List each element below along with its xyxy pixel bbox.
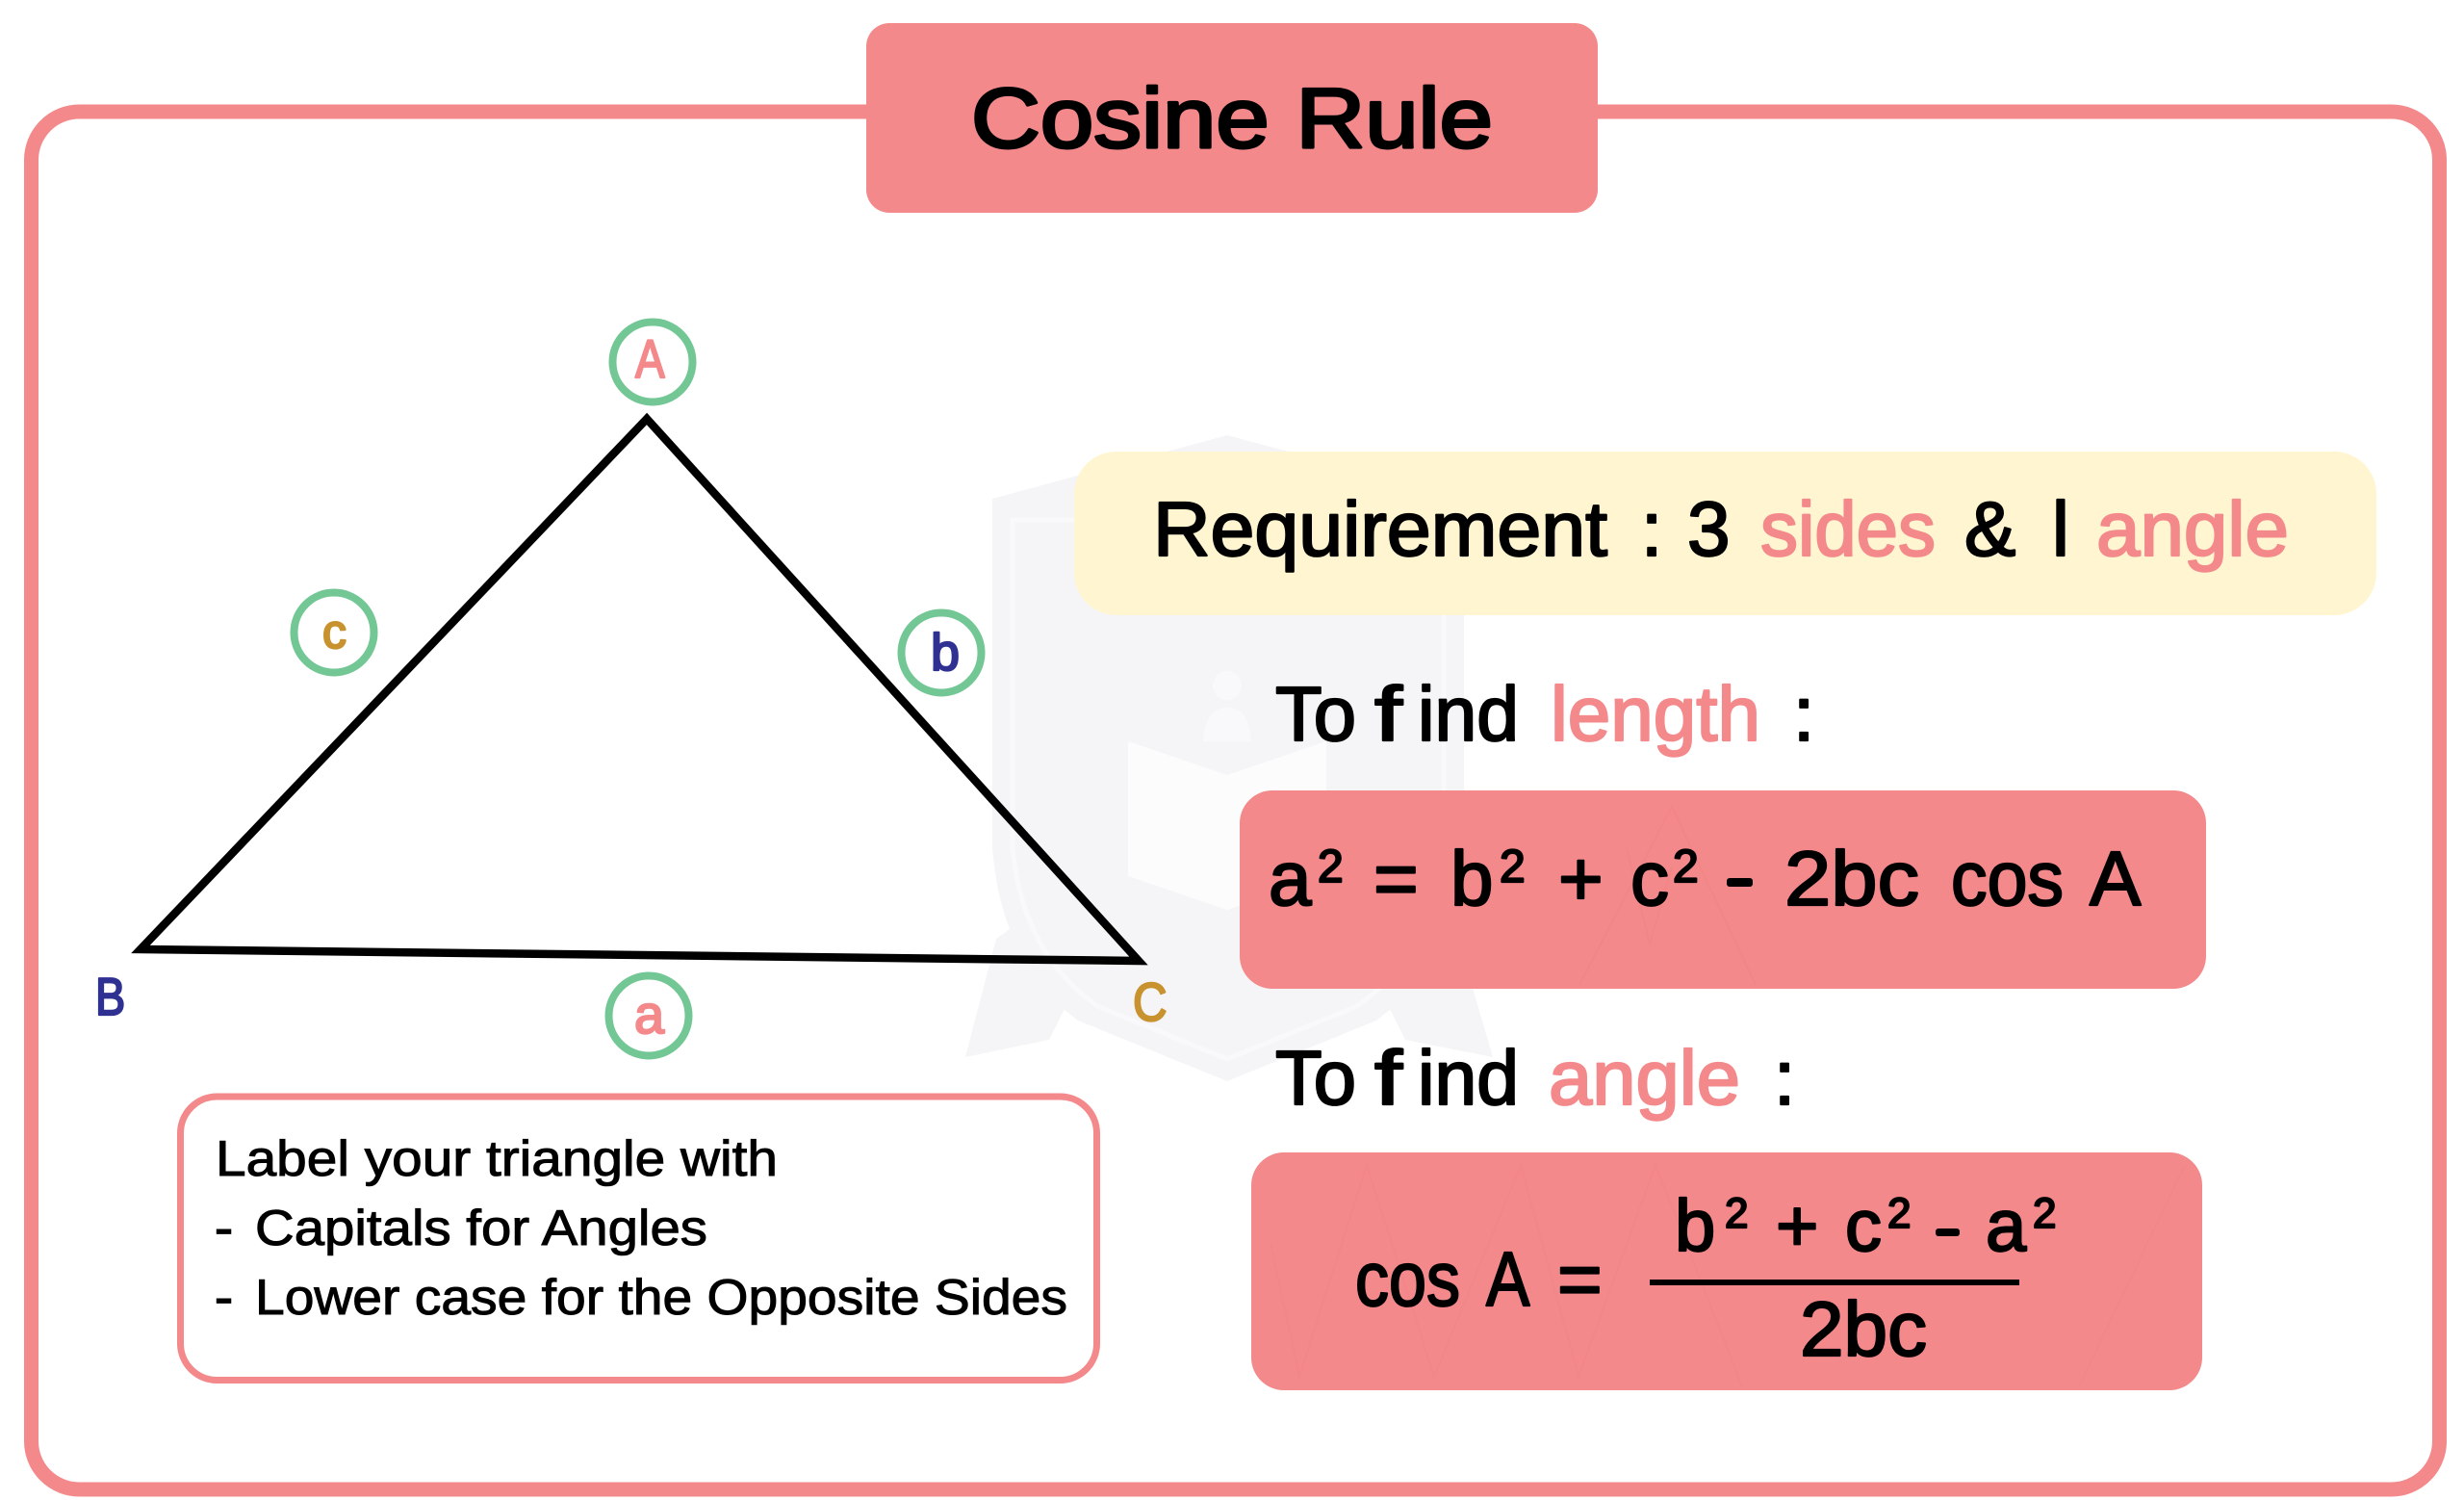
- formula box: length: [1240, 790, 2206, 989]
- fraction numerator: 2: [1887, 1190, 1911, 1237]
- formula left side: =: [1557, 1236, 1603, 1322]
- requirement text: :: [1641, 486, 1662, 572]
- fraction numerator: [1675, 1185, 2056, 1267]
- requirement box: [1074, 452, 2376, 615]
- fraction numerator: a: [1986, 1185, 2027, 1267]
- side label b: [901, 612, 982, 693]
- fraction numerator: 2: [2033, 1190, 2056, 1237]
- formula: a squared: +: [1558, 836, 1604, 921]
- side label a: a: [634, 984, 665, 1045]
- note line 3: -: [215, 1270, 233, 1326]
- heading: to find angle: [1275, 1035, 1795, 1121]
- fraction numerator: c: [1845, 1185, 1882, 1267]
- side label c: [295, 593, 373, 672]
- heading: to find angle: f: [1374, 1035, 1403, 1121]
- requirement text: [1153, 486, 2289, 572]
- note line 2: Capitals for Angles: [255, 1201, 707, 1256]
- side label a: [608, 976, 689, 1055]
- requirement text: 3: [1687, 486, 1731, 572]
- fraction numerator: +: [1776, 1185, 1818, 1267]
- formula: a squared: b: [1450, 836, 1494, 921]
- heading: to find length: [1275, 671, 1814, 757]
- fraction numerator: b: [1675, 1185, 1715, 1267]
- requirement text: Requirement: [1153, 486, 1607, 572]
- heading: to find angle: ind: [1418, 1035, 1519, 1121]
- requirement text: &: [1964, 486, 2015, 572]
- formula: a squared: 2: [1673, 841, 1699, 892]
- heading: to find length: length: [1551, 671, 1760, 757]
- heading: to find angle: angle: [1549, 1035, 1740, 1121]
- formula: a squared: 2: [1500, 841, 1526, 892]
- formula left side: [1355, 1236, 1603, 1322]
- heading: to find angle: :: [1774, 1035, 1795, 1121]
- formula: a squared: [1269, 836, 2142, 921]
- note line 1: Label your triangle with: [216, 1131, 778, 1187]
- heading: to find length: :: [1793, 671, 1814, 757]
- formula: a squared: cos: [1951, 836, 2064, 921]
- formula: a squared: 2: [1318, 841, 1344, 892]
- triangle: [141, 419, 1139, 961]
- fraction denominator: 2bc: [1800, 1286, 1927, 1372]
- fraction bar: [1650, 1280, 2019, 1285]
- side label c: c: [322, 605, 346, 659]
- formula: a squared: c: [1630, 836, 1669, 921]
- vertex label C: C: [1133, 971, 1168, 1032]
- formula left side: cos: [1355, 1236, 1460, 1322]
- vertex label A: A: [635, 328, 665, 389]
- formula: a squared: 2bc: [1784, 836, 1919, 921]
- formula: a squared: A: [2090, 836, 2142, 921]
- heading: to find length: f: [1374, 671, 1403, 757]
- formula: a squared: a: [1269, 836, 1312, 921]
- requirement text: sides: [1760, 486, 1936, 572]
- requirement text: l: [2052, 486, 2069, 572]
- heading: to find length: ind: [1418, 671, 1519, 757]
- formula box: angle: [1251, 1152, 2202, 1390]
- formula left side: A: [1486, 1236, 1530, 1322]
- note line 2: -: [215, 1201, 233, 1256]
- vertex label A: [612, 322, 693, 402]
- note box: [181, 1097, 1097, 1381]
- title banner: [866, 23, 1598, 213]
- note line 3: Lower case for the Opposite Sides: [255, 1270, 1067, 1326]
- formula: a squared: =: [1373, 836, 1419, 921]
- requirement text: angle: [2096, 486, 2289, 572]
- vertex label B: B: [95, 967, 125, 1026]
- title text: Cosine Rule: [971, 70, 1493, 166]
- fraction numerator: 2: [1725, 1190, 1748, 1237]
- side label b: b: [931, 624, 960, 682]
- heading: to find angle: To: [1275, 1035, 1356, 1121]
- watermark: faint crest: [965, 435, 1493, 1081]
- heading: to find length: To: [1275, 671, 1356, 757]
